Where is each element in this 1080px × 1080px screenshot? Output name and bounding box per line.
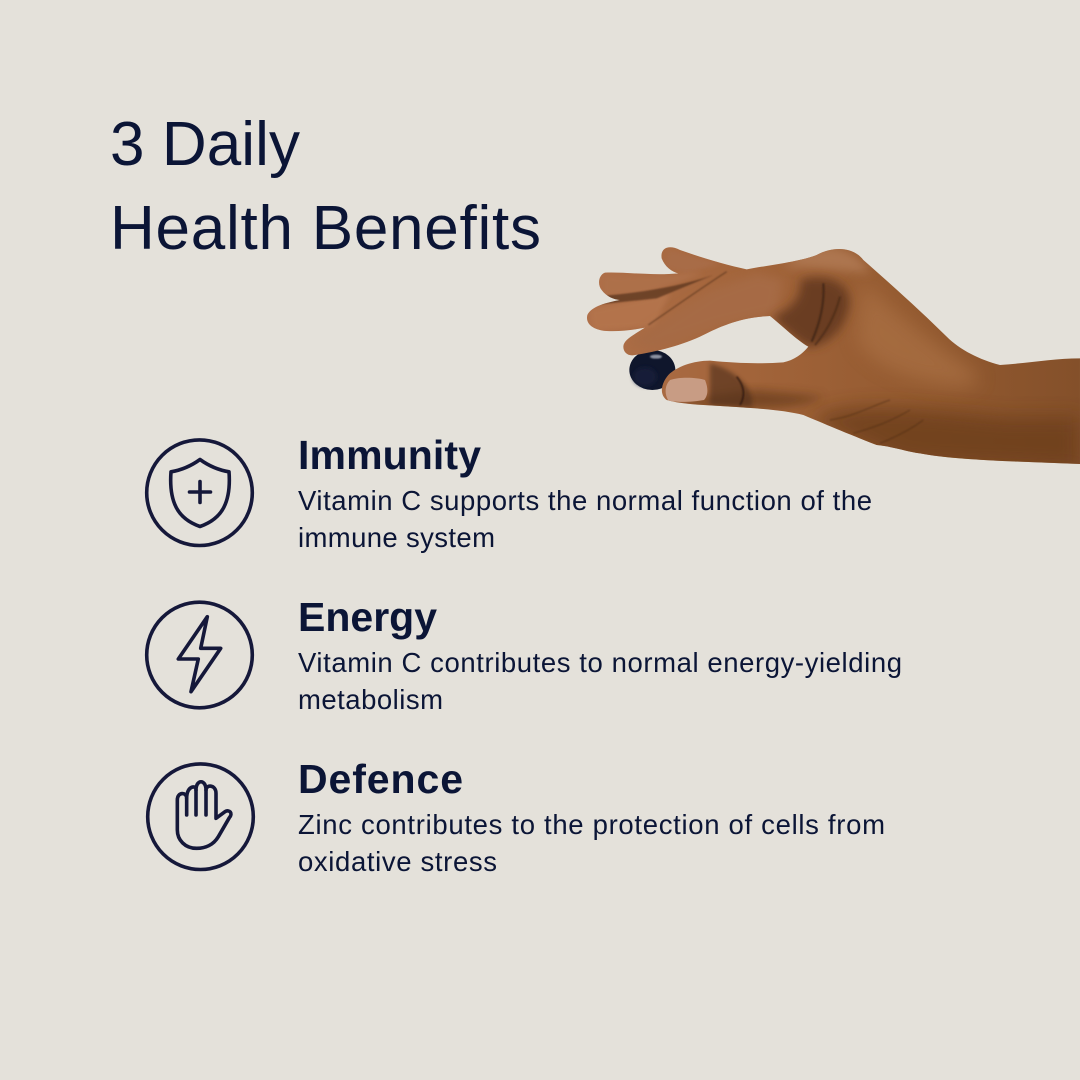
description: Energy: Vitamin C contributes to normal energy-yielding bbox=[298, 647, 902, 678]
heading: Energy: Energy bbox=[298, 594, 437, 640]
description: Defence: oxidative stress bbox=[298, 846, 497, 877]
description: Defence bbox=[298, 809, 885, 877]
description: Immunity bbox=[298, 485, 872, 553]
description: Immunity: Vitamin C supports the normal function of the bbox=[298, 485, 872, 516]
icon: lightning bolt bbox=[147, 602, 252, 708]
description: Energy: metabolism bbox=[298, 684, 443, 715]
benefit: Defence bbox=[148, 756, 885, 877]
title bbox=[110, 110, 541, 263]
description: Defence: Zinc contributes to the protection of cells from bbox=[298, 809, 885, 840]
icon: shield with plus bbox=[147, 440, 252, 546]
hand bbox=[587, 247, 1080, 464]
icon: raised hand bbox=[148, 764, 253, 870]
photo: hand holding gummy bbox=[587, 247, 1080, 464]
heading: Immunity: Immunity bbox=[298, 432, 481, 478]
heading: Defence: Defence bbox=[298, 756, 463, 802]
description: Immunity: immune system bbox=[298, 522, 495, 553]
title: 3 Daily bbox=[110, 110, 300, 179]
title: Health Benefits bbox=[110, 194, 541, 263]
thumbnail bbox=[666, 378, 707, 402]
benefit: Energy bbox=[147, 594, 902, 715]
description: Energy bbox=[298, 647, 902, 715]
benefit: Immunity bbox=[147, 432, 872, 553]
gummy bbox=[629, 350, 675, 390]
